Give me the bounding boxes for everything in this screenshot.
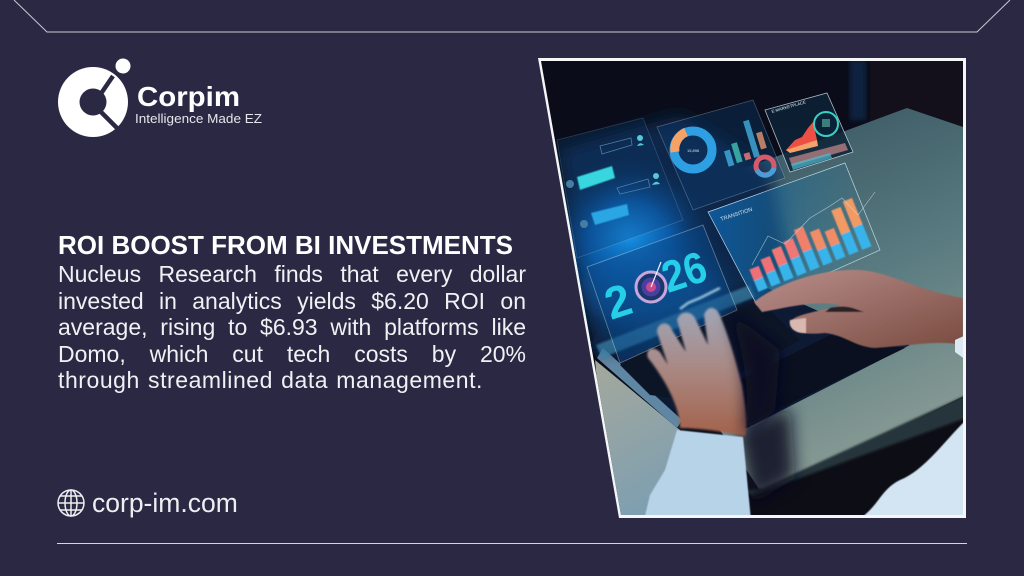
screen glow [560, 115, 790, 350]
left shirt cuff [644, 430, 751, 520]
logo wordmark: Corpim [137, 81, 240, 112]
panel: chat [557, 118, 683, 258]
panel: donut and bars [657, 100, 785, 210]
stacked bars [739, 198, 871, 292]
website url: corp-im.com [92, 488, 238, 518]
bottom rule [57, 542, 967, 544]
laptop [590, 280, 910, 428]
right hand [754, 270, 963, 348]
desk left [595, 360, 680, 520]
panel: marketplace [765, 93, 853, 172]
photo: hands on laptop with holographic dashboards [538, 58, 968, 520]
panel: 2026 target [587, 225, 737, 363]
logo icon [58, 58, 130, 137]
area chart [786, 122, 817, 151]
heading: ROI BOOST FROM BI INVESTMENTS [58, 230, 513, 260]
panel: transition bar chart: TRANSITION [720, 207, 753, 223]
globe icon [58, 490, 84, 516]
target icon [636, 272, 666, 302]
body text [58, 261, 526, 393]
body text: average, rising to $6.93 with platforms like [58, 314, 526, 340]
body text: invested in analytics yields $6.20 ROI on [58, 288, 526, 314]
desk [700, 108, 966, 495]
logo [58, 58, 262, 137]
panel: 2026 target: 26 [656, 242, 713, 303]
panel: donut and bars: 15,896 [687, 148, 700, 153]
panel: transition bar chart [708, 163, 880, 305]
hand shadow [728, 310, 780, 438]
right shirt sleeve [864, 422, 963, 515]
panel: marketplace: E-MARKETPLACE [771, 99, 806, 114]
gauge [814, 112, 838, 136]
body text: Nucleus Research finds that every dollar [58, 261, 526, 287]
stripes [789, 143, 848, 166]
donut chart [674, 131, 712, 169]
chat bubbles [577, 166, 615, 190]
left hand [647, 308, 746, 436]
body text: Domo, which cut tech costs by 20% [58, 341, 526, 367]
desk shadow by laptop [738, 408, 795, 505]
mini bars [724, 120, 767, 167]
keyboard [620, 300, 800, 400]
body text: through streamlined data management. [58, 367, 483, 393]
logo tagline: Intelligence Made EZ [135, 111, 262, 126]
small ring [756, 157, 774, 175]
year digits: 2 [598, 273, 638, 330]
top frame line [14, 0, 1010, 32]
sparkline [680, 288, 720, 309]
